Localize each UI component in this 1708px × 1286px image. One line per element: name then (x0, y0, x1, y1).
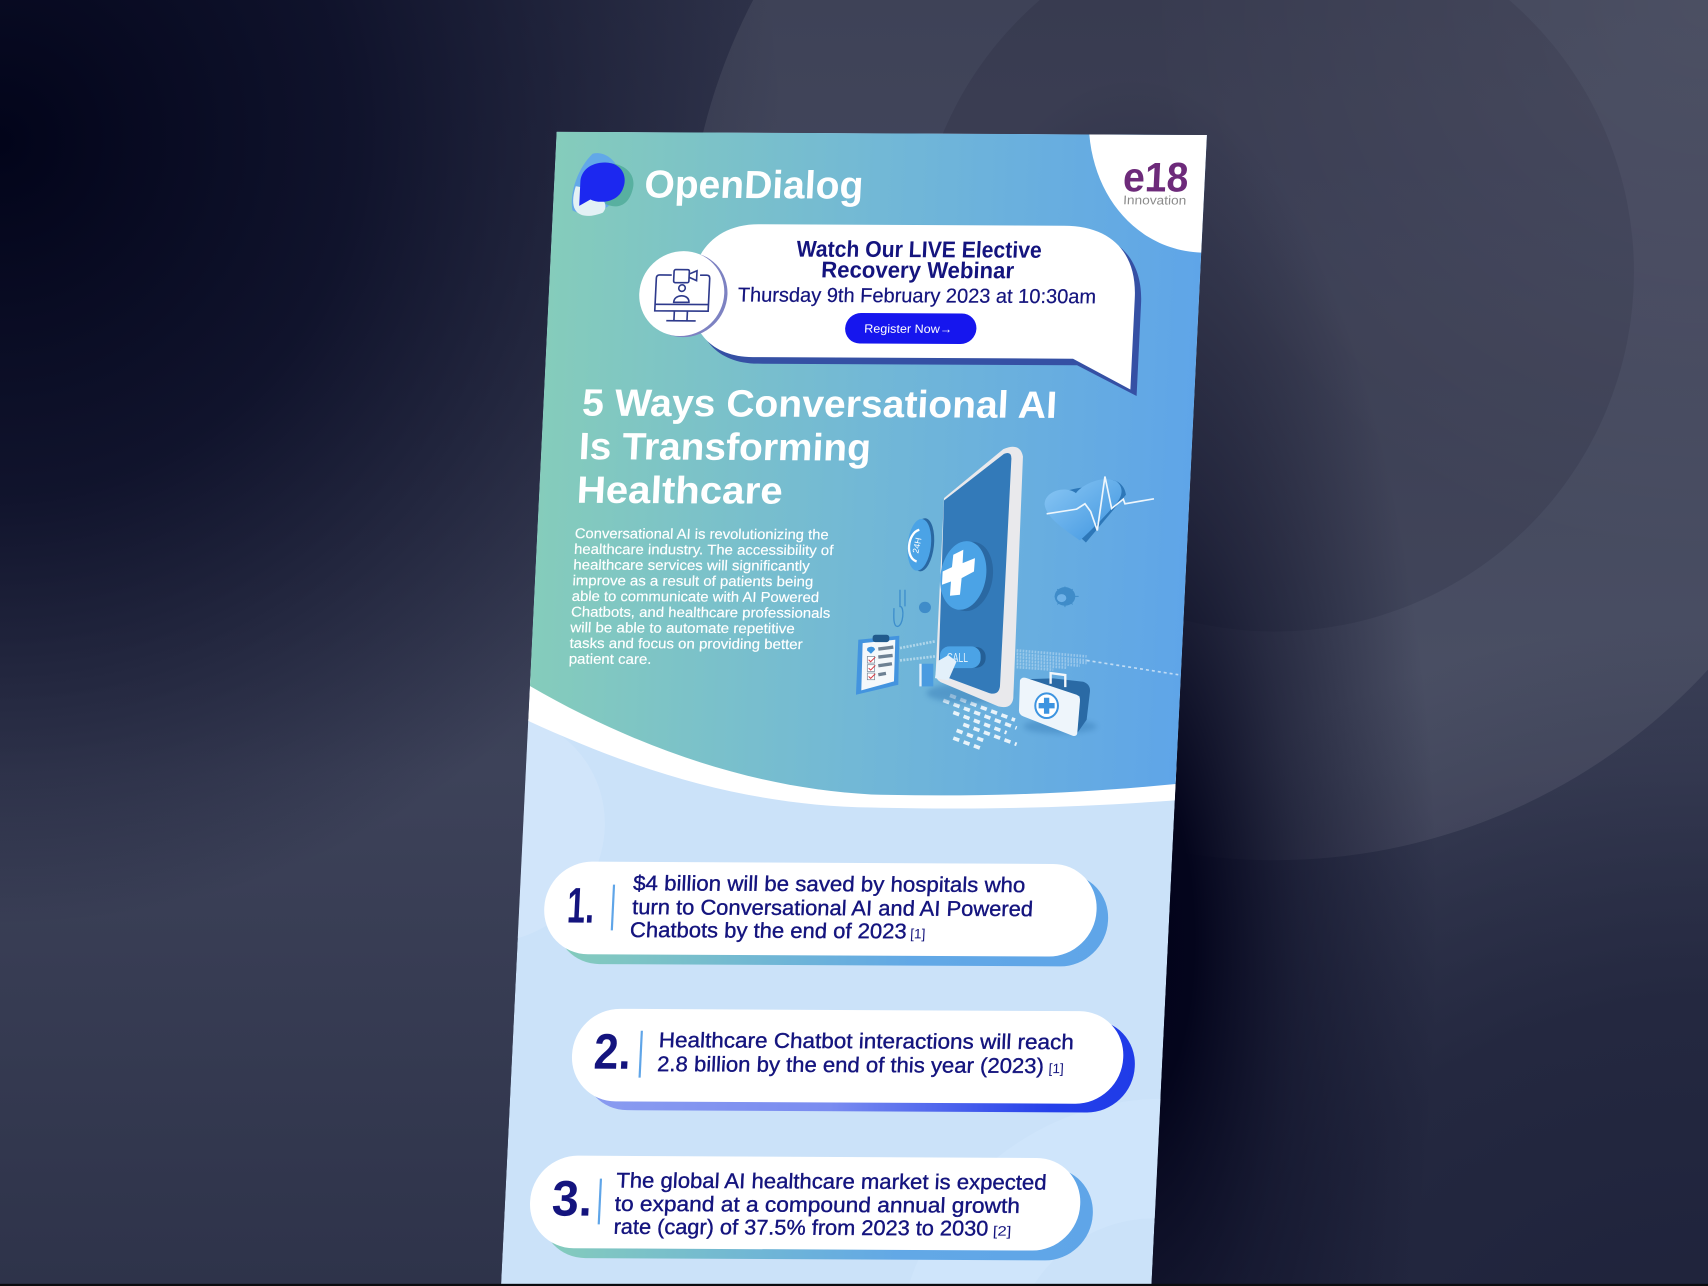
intro paragraph: improve as a result of patients being (572, 573, 814, 590)
intro paragraph: will be able to automate repetitive (569, 620, 795, 637)
register button: Register Now→ (864, 322, 953, 336)
small virus (919, 602, 931, 613)
webinar date: Thursday 9th February 2023 at 10:30am (737, 284, 1097, 308)
webinar speech bubble (686, 224, 1145, 396)
stat card 3 (527, 1155, 1095, 1261)
healthcare phone illustration (856, 447, 1178, 748)
call button and hand (919, 646, 986, 686)
24H badge: 24H (910, 537, 924, 554)
stat card 1 (542, 861, 1111, 967)
phone (927, 447, 1023, 707)
stat card 2: [1] (1048, 1061, 1064, 1076)
stat card 3: The global AI healthcare market is expected (616, 1168, 1047, 1195)
stat card 2: 2. (593, 1024, 632, 1080)
webinar heading: Watch Our LIVE Elective (796, 236, 1042, 263)
world map dots (900, 641, 1178, 748)
webinar speech bubble: Recovery Webinar (821, 256, 1015, 283)
main title: 5 Ways Conversational AI (581, 382, 1058, 427)
icon: chat bubble logo (571, 153, 635, 216)
stat card 3: 3. (551, 1170, 594, 1227)
stat card 3: [2] (992, 1224, 1012, 1239)
wordmark: OpenDialog (643, 163, 865, 208)
heart with ECG line (1045, 476, 1154, 542)
clipboard (856, 635, 899, 695)
icon: video monitor in circle (637, 251, 730, 337)
intro paragraph: healthcare services will significantly (573, 557, 811, 575)
bottom screen edge (0, 1284, 1708, 1286)
e18 corner badge: Innovation (1123, 193, 1187, 208)
stethoscope (894, 590, 905, 626)
e18 corner badge: e18 (1122, 154, 1190, 201)
virus (1055, 586, 1079, 607)
main title: Healthcare (576, 469, 784, 513)
register button (844, 313, 977, 344)
intro paragraph: tasks and focus on providing better (569, 636, 803, 653)
stat card 2: 2.8 billion by the end of this year (2023) (657, 1052, 1045, 1078)
intro paragraph: patient care. (568, 652, 652, 668)
e18 corner badge (1084, 134, 1207, 253)
call button and hand: CALL (947, 651, 968, 665)
intro paragraph: Conversational AI is revolutionizing the (574, 526, 829, 543)
stat card 1: Chatbots by the end of 2023 (629, 918, 907, 943)
24H badge (905, 517, 937, 572)
stat card 2: Healthcare Chatbot interactions will reach (658, 1028, 1074, 1054)
stat card 2 (569, 1009, 1137, 1113)
infographic card (501, 132, 1207, 1284)
stat card 1: [1] (910, 926, 926, 941)
white wave band (524, 676, 1181, 810)
stat card 1: 1. (566, 878, 596, 934)
intro paragraph: Chatbots, and healthcare professionals (571, 605, 831, 622)
OpenDialog logo (571, 153, 865, 217)
main title: Is Transforming (578, 425, 872, 470)
intro paragraph (567, 526, 835, 669)
lower pale blue panel (501, 132, 1207, 1284)
intro paragraph: healthcare industry. The accessibility of (574, 542, 834, 559)
hero gradient banner (525, 132, 1207, 797)
stat card 1: turn to Conversational AI and AI Powered (632, 895, 1034, 921)
plus disc (935, 537, 998, 615)
stat card 3: to expand at a compound annual growth (614, 1192, 1021, 1218)
main title (578, 389, 1056, 504)
stat card 1: $4 billion will be saved by hospitals who (633, 871, 1026, 897)
stat card 3: rate (cagr) of 37.5% from 2023 to 2030 (613, 1215, 989, 1241)
intro paragraph: able to communicate with AI Powered (571, 589, 819, 606)
medical kit (1019, 673, 1097, 736)
